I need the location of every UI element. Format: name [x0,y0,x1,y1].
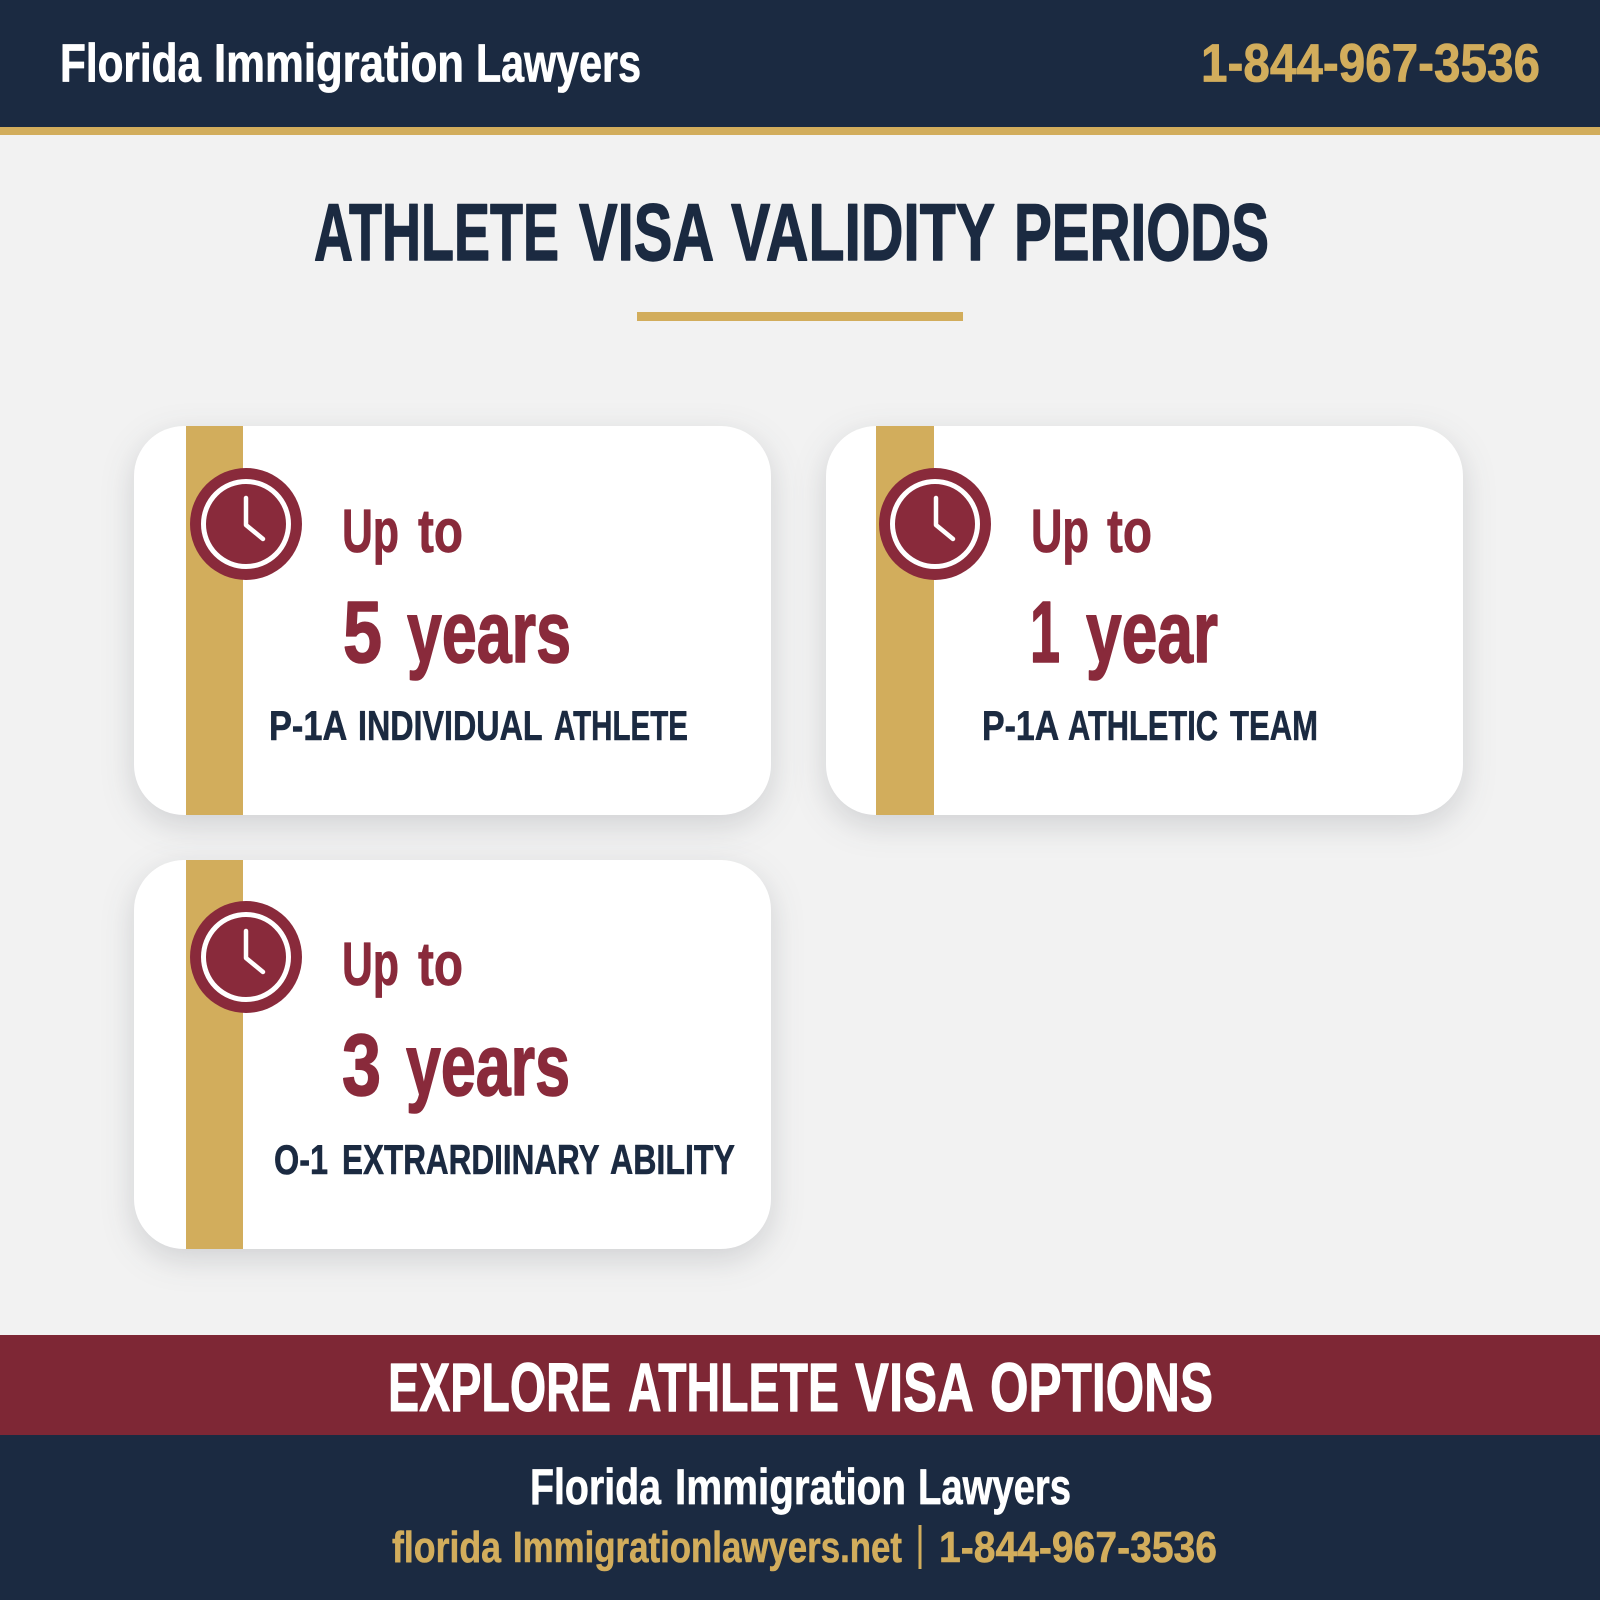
panel: P-1A individual athlete [134,426,771,815]
title: PERIODS [1014,188,1269,278]
duration: 1 [1030,584,1060,681]
icon: clock [879,468,991,580]
header firm name: Immigration [214,34,464,94]
call to action text: EXPLORE [388,1349,611,1426]
title underline [637,312,963,321]
footer phone number: 1-844-967-3536 [939,1523,1217,1572]
call to action text: VISA [855,1349,973,1426]
footer firm name: Lawyers [918,1459,1071,1515]
visa type: P-1A [269,702,347,749]
up to label: to [418,497,463,565]
visa type: INDIVIDUAL [358,702,542,749]
visa type: O-1 [274,1136,328,1183]
title: ATHLETE [314,188,559,278]
up to label: to [1107,497,1152,565]
duration: 3 [342,1017,381,1114]
header bar [0,0,1600,135]
up to label: Up [1031,497,1089,565]
up to label: Up [342,930,399,998]
visa type: ABILITY [610,1136,735,1183]
footer firm name: Florida [530,1459,662,1515]
header firm name: Florida [60,34,202,94]
call to action text: ATHLETE [628,1349,839,1426]
visa type: ATHLETIC [1068,702,1218,749]
icon: clock [190,901,302,1013]
call to action banner [0,1335,1600,1435]
title: VISA [579,188,713,278]
footer firm name: Immigration [675,1459,906,1515]
header firm name: Lawyers [476,34,641,94]
footer website: florida [392,1523,501,1572]
visa type: P-1A [982,702,1059,749]
call to action text: OPTIONS [990,1349,1213,1426]
visa type: TEAM [1230,702,1318,749]
footer [0,1435,1600,1600]
panel: O-1 extraordinary ability [134,860,771,1249]
duration: 5 [343,584,382,681]
footer website: Immigrationlawyers.net [513,1523,902,1572]
visa type: EXTRARDIINARY [342,1136,600,1183]
header phone number: 1-844-967-3536 [1201,34,1540,94]
up to label: Up [342,497,399,565]
up to label: to [418,930,463,998]
duration: years [406,1017,570,1114]
title: VALIDITY [731,188,994,278]
panel: P-1A athletic team [826,426,1463,815]
duration: year [1086,584,1218,681]
visa type: ATHLETE [554,702,688,749]
icon: clock [190,468,302,580]
footer separator [918,1525,922,1569]
duration: years [407,584,571,681]
